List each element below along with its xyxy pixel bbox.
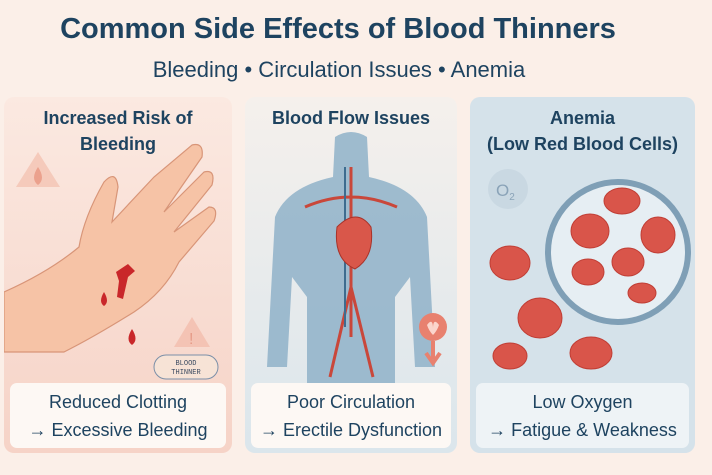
heading: bleeding (43, 108, 193, 154)
panel: anemia (470, 97, 695, 453)
heading: bleeding: Bleeding (80, 134, 156, 154)
illustration: hand with bleeding: THINNER (171, 369, 202, 377)
illustration: body with heart (267, 132, 447, 383)
illustration: hand with bleeding: BLOOD (175, 360, 197, 368)
text box: blood flow: → Erectile Dysfunction (260, 420, 442, 440)
heading: bleeding: Increased Risk of (43, 108, 193, 128)
text box: anemia (476, 383, 689, 448)
heading: anemia: Anemia (550, 108, 615, 128)
panel: blood flow (245, 97, 457, 453)
text box: bleeding (10, 383, 226, 448)
illustration: red blood cells: 2 (509, 192, 515, 203)
subtitle: Bleeding • Circulation Issues • Anemia (153, 57, 525, 82)
text box: bleeding: Reduced Clotting (49, 392, 187, 412)
text box: bleeding: → Excessive Bleeding (28, 420, 208, 440)
text box: blood flow (251, 383, 451, 448)
illustration: hand with bleeding: ! (189, 331, 193, 348)
title: Common Side Effects of Blood Thinners (60, 13, 616, 45)
text box: anemia: → Fatigue & Weakness (488, 420, 677, 440)
heading: anemia (487, 108, 678, 154)
text box: anemia: Low Oxygen (532, 392, 633, 412)
illustration: hand with bleeding (4, 144, 218, 380)
illustration: red blood cells: O (496, 181, 509, 200)
panel: bleeding (4, 97, 232, 453)
heading: anemia: (Low Red Blood Cells) (487, 134, 678, 154)
heading: blood flow: Blood Flow Issues (272, 108, 430, 128)
illustration: red blood cells (488, 169, 691, 370)
text box: blood flow: Poor Circulation (287, 392, 415, 412)
